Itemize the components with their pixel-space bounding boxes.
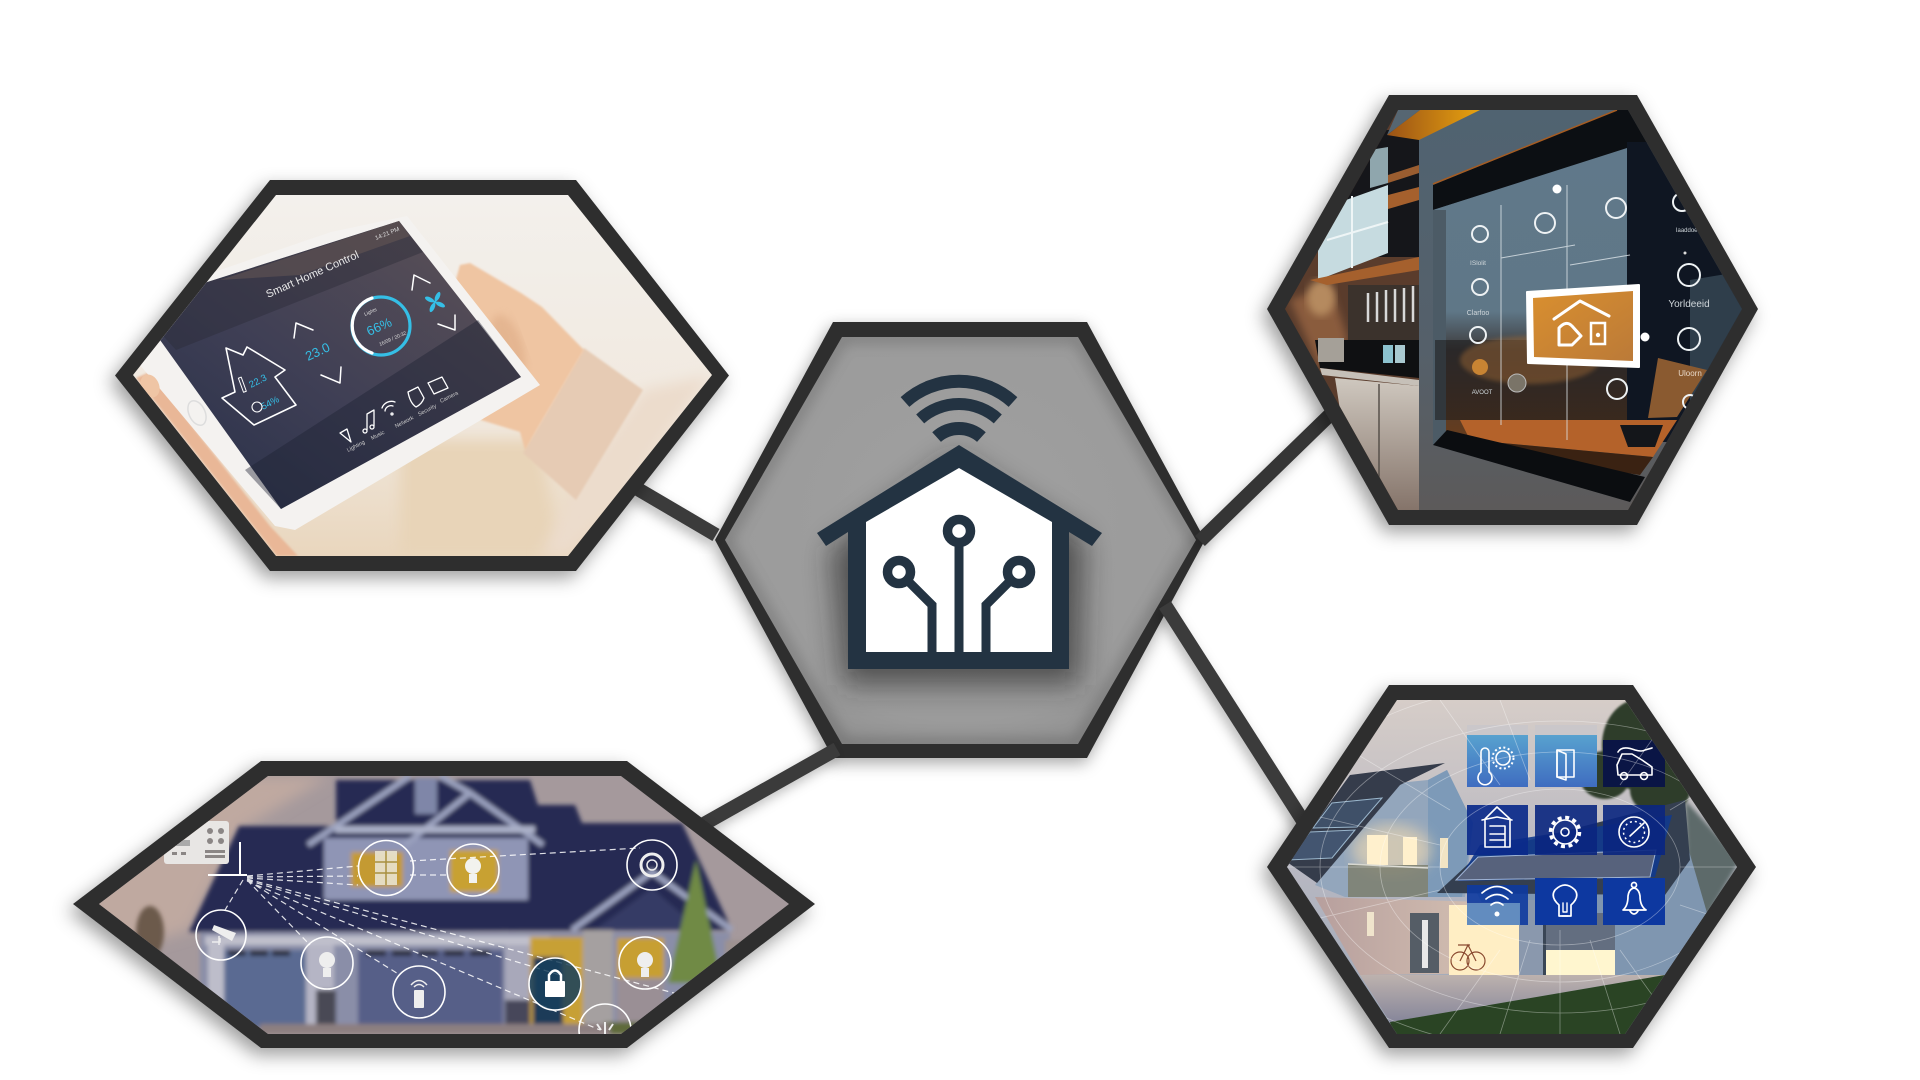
panel: kitchen interface photo [1267,95,1758,525]
front door [1410,913,1439,973]
kitchen hexagon frame [1267,95,1758,525]
node: sprinkler [579,1004,631,1056]
tablet screen: Security [417,403,438,418]
window glow [1352,824,1432,876]
node: cctv [196,910,246,960]
tile: bulb [1535,878,1597,925]
solar roof [1437,800,1690,895]
tile: settings [1535,805,1597,855]
bottom menu [340,377,448,442]
control panel icon [164,821,247,876]
tablet screen: 16/09 / 20:32 [378,330,408,348]
panel: house network photo [73,761,815,1056]
tree right [668,860,722,983]
house outline [817,445,1102,669]
pillow and bowl [1648,358,1707,418]
connector: kitchen to hub [1200,405,1340,541]
connector: solar house to hub [1165,605,1312,835]
status bar: 14:21 PM [375,227,401,242]
gable wall [324,838,528,900]
light dial [352,297,410,355]
faint data lines [1501,185,1630,440]
icon: house with circuit and wifi [817,381,1102,685]
panel: tablet smart home control photo [115,180,729,571]
house widget [222,347,296,425]
node: lock [529,958,581,1010]
tablet screen: Lights [363,307,378,318]
tile: wifi [1467,885,1528,925]
left roof [1287,763,1445,883]
node: bulb right [619,937,671,989]
interface labels: Yorldeeid [1668,299,1710,310]
tablet screen: 66% [364,314,394,339]
blue solar panels [1458,815,1672,881]
orange control card [1527,285,1639,367]
node: window [358,840,414,896]
left finger [140,374,160,398]
tablet screen: Music [370,430,386,442]
sleeve fade [540,375,712,556]
sleeve [523,348,643,500]
tablet screen: 22.3 [247,372,269,391]
tablet photo [120,195,715,557]
upper wall [1315,770,1473,897]
interface labels: Uloorn [1678,369,1702,378]
rafters [308,776,732,930]
counter and appliances [1315,340,1419,378]
ground band [260,1024,610,1034]
shrub left [136,906,164,958]
connector: tablet to hub [636,488,716,535]
right gable [595,888,700,930]
interface labels: Iaaddoeed [1676,228,1704,234]
right wing wall [1470,820,1712,975]
main roof [189,780,732,932]
interface circles [1470,193,1700,409]
temperature control [294,323,313,338]
solar house hexagon frame [1267,685,1756,1048]
tablet screen [135,221,521,509]
backsplash [1348,285,1419,340]
tile: electric car [1603,740,1665,787]
tablet body [140,262,540,530]
garage windows [228,950,490,956]
wooden shelf [1310,257,1419,285]
hub hexagon frame [715,322,1205,758]
lower storey [200,932,730,1032]
paving [1360,975,1665,1022]
tablet screen: Lighting [346,440,366,454]
tree [1579,699,1690,815]
room reflection [1435,340,1627,420]
tile: bell [1603,878,1665,925]
tablet screen: 23.0 [303,339,332,364]
hub hexagon fill [725,337,1196,744]
lit lower wall [1315,897,1517,975]
connector: house network to hub [695,749,837,829]
interface labels: ISlolit [1470,260,1486,267]
node: bulb upper [447,844,499,896]
app tile grid [1467,725,1665,925]
tablet hexagon frame [115,180,729,571]
wall panel [1419,110,1749,510]
fan control [412,275,430,290]
tile: temperature [1467,725,1528,787]
tile: garage [1467,805,1528,855]
ceiling light [1387,110,1480,140]
tablet screen: Camera [439,390,460,405]
circuit traces [905,545,1013,655]
node: security camera [627,840,677,890]
node: remote [393,966,445,1018]
windows [1367,835,1388,865]
network house hexagon frame [73,761,815,1048]
grey wall and garage door [1519,900,1545,975]
bicycle [1451,945,1485,970]
table [1460,420,1677,457]
lit garage opening [1449,905,1519,975]
balcony [1348,865,1428,897]
interface labels: Clarfoo [1467,310,1489,317]
front door [530,937,585,1029]
left wrist [136,372,298,556]
radial network overlay [1260,682,1860,1052]
panel: solar house app icons photo [1254,680,1759,1067]
right hand [450,263,584,450]
glass display [1433,148,1627,445]
tablet screen: 54% [259,394,282,413]
tile: door [1535,725,1597,787]
dashed network lines [225,848,700,1030]
dark band [1433,110,1650,210]
tablet screen: Network [394,415,415,430]
interface labels: AVOOT [1472,390,1493,396]
tile: gauge [1603,805,1665,855]
network house photo [90,776,800,1056]
grass [1390,975,1665,1034]
wifi arcs [905,381,1013,437]
dark right wall [1627,142,1747,442]
solar house photo [1287,700,1737,1034]
node: bulb left [301,937,353,989]
lower cabinets [1335,378,1419,510]
panel: central smart home hub [715,322,1205,758]
interface labels [1467,228,1710,396]
kitchen photo [1280,110,1750,510]
bottom dark band [1433,430,1645,502]
screen title: Smart Home Control [264,249,361,301]
upper cabinet and window [1330,130,1419,257]
